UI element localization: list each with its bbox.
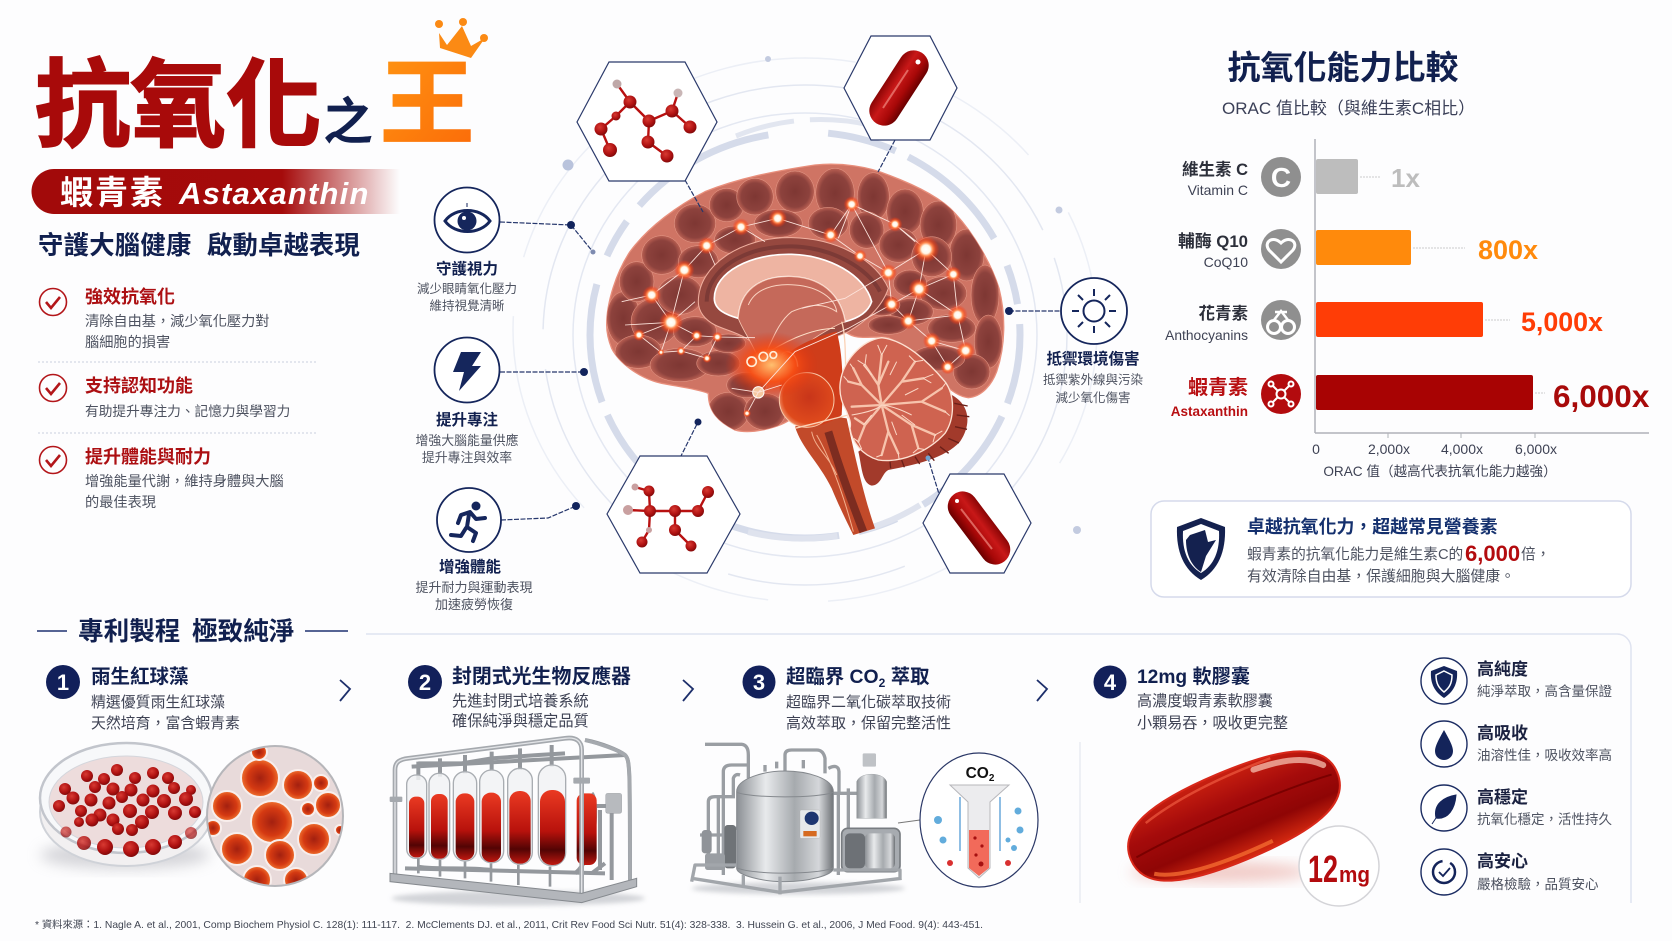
central glow xyxy=(725,332,818,398)
step 4: softgel: 12mg 軟膠囊 xyxy=(1137,666,1250,688)
step 1: haematococcus: 雨生紅球藻 xyxy=(91,666,189,688)
base frame xyxy=(692,865,902,892)
arrow xyxy=(340,680,350,701)
feature: safety: 高安心 xyxy=(1477,851,1528,871)
feature: absorption xyxy=(1421,721,1612,767)
benefit icon: focus xyxy=(415,338,519,465)
feature: absorption: 油溶性佳，吸收效率高 xyxy=(1477,747,1612,763)
row: vitamin C: C xyxy=(1271,162,1291,193)
benefit: stamina xyxy=(40,446,284,511)
axis labels: 2,000x xyxy=(1368,441,1410,457)
panel: quality features xyxy=(1421,658,1612,895)
step 3: supercritical CO2: 3 xyxy=(753,670,765,695)
row: astaxanthin: 蝦青素 xyxy=(1188,376,1248,399)
row: anthocyanins: Anthocyanins xyxy=(1165,328,1248,343)
hexagon: capsule top xyxy=(844,36,957,140)
panel: benefits checklist xyxy=(38,286,318,511)
step 2: photobioreactor: 先進封閉式培養系統 xyxy=(452,692,589,710)
benefit: strong antioxidant: 強效抗氧化 xyxy=(85,286,175,307)
step 3: supercritical CO2 xyxy=(692,666,1038,894)
heading: patented process xyxy=(37,617,348,646)
illustration: CO2 circle: 2 xyxy=(989,773,995,784)
limbic band xyxy=(698,238,888,352)
benefit icon: vision: 減少眼睛氧化壓力 xyxy=(417,281,517,296)
thalamus beads xyxy=(747,352,777,366)
row: vitamin C: Vitamin C xyxy=(1188,182,1248,198)
row: CoQ10: 輔酶 Q10 xyxy=(1178,232,1248,251)
subtitle banner: Astaxanthin: Astaxanthin xyxy=(178,176,370,211)
reactor tubes xyxy=(407,765,566,866)
feature: purity: 高純度 xyxy=(1477,659,1528,679)
step 2: photobioreactor: 確保純淨與穩定品質 xyxy=(452,712,589,730)
illustration: glowing brain xyxy=(607,164,1004,535)
heading: patented process: 極致純淨 xyxy=(192,617,294,646)
callout: superior antioxidant: 6,000 xyxy=(1465,541,1520,566)
illustration: softgel capsule xyxy=(1113,731,1355,901)
row: vitamin C xyxy=(1182,157,1420,198)
step 4: softgel: 高濃度蝦青素軟膠囊 xyxy=(1137,693,1273,710)
title xyxy=(35,18,488,160)
benefit: cognitive support: 有助提升專注力、記憶力與學習力 xyxy=(85,403,290,419)
benefit icon: stamina xyxy=(415,488,533,612)
icon: shield xyxy=(1177,518,1225,580)
back frame and pipes xyxy=(405,740,630,880)
heading: ORAC comparison xyxy=(1222,49,1475,118)
callout: superior antioxidant: 有效清除自由基，保護細胞與大腦健康。 xyxy=(1247,568,1515,585)
cerebrum base xyxy=(607,164,1004,432)
benefit: strong antioxidant: 清除自由基，減少氧化壓力對 xyxy=(85,313,269,330)
benefit icon: focus: 提升專注與效率 xyxy=(422,450,512,465)
axis labels: 6,000x xyxy=(1515,441,1557,457)
cerebellum xyxy=(840,338,952,461)
step 1: haematococcus: 精選優質雨生紅球藻 xyxy=(91,693,225,711)
benefit: stamina: 提升體能與耐力 xyxy=(85,446,211,467)
row: anthocyanins: 花青素 xyxy=(1198,304,1248,323)
row: CoQ10: 800x xyxy=(1478,235,1538,265)
callout: superior antioxidant: 蝦青素的抗氧化能力是維生素C的 xyxy=(1247,546,1463,563)
feature: safety xyxy=(1421,849,1599,895)
badge: 12mg: mg xyxy=(1339,862,1370,887)
step 2: photobioreactor: 封閉式光生物反應器 xyxy=(452,664,631,688)
benefit icon: environment protection: 抵禦環境傷害 xyxy=(1046,349,1140,368)
benefit: strong antioxidant xyxy=(40,286,269,351)
heading: ORAC comparison: 抗氧化能力比較 xyxy=(1228,49,1458,86)
badge: 12mg xyxy=(1299,826,1379,906)
callout: superior antioxidant: 卓越抗氧化力，超越常見營養素 xyxy=(1247,516,1498,537)
illustration: CO2 circle: CO xyxy=(966,765,989,782)
row: astaxanthin xyxy=(1171,374,1650,419)
connector end dots xyxy=(567,221,1013,510)
benefit icon: environment protection: 減少氧化傷害 xyxy=(1055,390,1131,405)
row: astaxanthin: 6,000x xyxy=(1553,378,1650,414)
illustration: CO2 circle xyxy=(898,753,1038,887)
row: CoQ10: CoQ10 xyxy=(1204,254,1248,270)
hexagon: molecule top xyxy=(577,62,717,181)
benefit icon: focus: 提升專注 xyxy=(436,410,498,429)
axis labels: ORAC 值（越高代表抗氧化能力越強） xyxy=(1323,463,1557,479)
feature: purity xyxy=(1421,658,1612,704)
row: vitamin C: 維生素 C xyxy=(1182,160,1248,179)
feature: purity: 純淨萃取，高含量保證 xyxy=(1477,683,1612,699)
benefit: stamina: 的最佳表現 xyxy=(85,495,156,511)
benefit icon: vision: 守護視力 xyxy=(436,259,498,278)
benefit: cognitive support: 支持認知功能 xyxy=(85,376,193,396)
step 2: photobioreactor: 2 xyxy=(419,670,431,695)
right vessel xyxy=(863,753,876,767)
step 2: photobioreactor xyxy=(390,664,645,906)
footnote: sources: * 資料來源：1. Nagle A. et al., 2001, Comp Biochem Physiol C. 128(1): 111-117. 2. McClements DJ. et al., 2011, Crit Rev Food Sci Nutr. 51(4): 328-338. 3. Hussein G. et al., 2006, J Med Food. 9(4): 443-451. xyxy=(35,918,983,931)
step 1: haematococcus: 1 xyxy=(57,670,69,695)
subtitle banner: Astaxanthin xyxy=(32,169,400,214)
background tech rings xyxy=(513,56,1097,602)
bar chart: ORAC values xyxy=(1165,139,1650,479)
gyri xyxy=(607,168,1002,431)
axis labels xyxy=(1312,441,1557,479)
callout: superior antioxidant xyxy=(1151,501,1631,597)
step 4: softgel xyxy=(1080,666,1379,906)
row: astaxanthin: Astaxanthin xyxy=(1171,404,1248,419)
feature: stability xyxy=(1421,785,1612,831)
glowing neural nodes xyxy=(633,196,975,417)
row: anthocyanins xyxy=(1165,300,1603,343)
feature: safety: 嚴格檢驗，品質安心 xyxy=(1477,876,1599,892)
benefit icon: environment protection: 抵禦紫外線與污染 xyxy=(1043,372,1143,387)
panel outline: process xyxy=(366,634,1631,903)
feature: absorption: 高吸收 xyxy=(1477,723,1528,743)
row: anthocyanins: 5,000x xyxy=(1521,307,1603,337)
step 4: softgel: 小顆易吞，吸收更完整 xyxy=(1137,715,1288,732)
cerebellum back lamellae xyxy=(858,393,969,486)
benefit icon: stamina: 增強體能 xyxy=(439,557,501,576)
benefit: strong antioxidant: 腦細胞的損害 xyxy=(85,335,170,351)
arrow xyxy=(1037,680,1047,701)
title: 之 xyxy=(323,94,373,150)
step 4: softgel: 4 xyxy=(1104,670,1117,695)
step 3: supercritical CO2: 超臨界 CO xyxy=(786,666,879,688)
benefit icon: vision xyxy=(417,188,517,313)
step 1: haematococcus: 天然培育，富含蝦青素 xyxy=(91,714,240,732)
feature: stability: 抗氧化穩定，活性持久 xyxy=(1477,812,1612,827)
badge: 12mg: 12 xyxy=(1308,849,1338,891)
step 1: haematococcus xyxy=(40,665,345,894)
title: 王 xyxy=(380,52,474,157)
step 3: supercritical CO2: 萃取 xyxy=(885,666,930,688)
axis labels: 0 xyxy=(1312,441,1320,457)
arrow xyxy=(683,680,693,701)
step 3: supercritical CO2: 超臨界二氧化碳萃取技術 xyxy=(786,694,951,711)
illustration: petri dish xyxy=(40,743,212,869)
pipework xyxy=(700,744,858,875)
benefit icon: stamina: 加速疲勞恢復 xyxy=(435,597,513,612)
callout: superior antioxidant: 倍， xyxy=(1521,546,1550,563)
step 3: supercritical CO2: 2 xyxy=(879,676,886,690)
hexagon: capsule bottom xyxy=(923,474,1031,573)
benefit icon: environment protection xyxy=(1043,278,1143,405)
tagline: 守護大腦健康 xyxy=(38,232,192,260)
step 3: supercritical CO2: 高效萃取，保留完整活性 xyxy=(786,715,951,732)
feature: stability: 高穩定 xyxy=(1477,787,1528,807)
row: CoQ10 xyxy=(1178,229,1538,270)
illustration: algae cell magnified xyxy=(205,744,345,894)
benefit icon: focus: 增強大腦能量供應 xyxy=(415,433,519,448)
hexagon: molecule bottom xyxy=(607,456,740,573)
inner dome xyxy=(738,277,845,358)
icon: crown xyxy=(435,18,488,58)
heading: ORAC comparison: ORAC 值比較（與維生素C相比） xyxy=(1222,99,1475,118)
subtitle banner: Astaxanthin: 蝦青素 xyxy=(60,174,165,211)
neural network lines xyxy=(622,204,966,413)
brain stem xyxy=(795,415,875,535)
crescent: corpus callosum xyxy=(714,254,872,322)
illustration: extraction tank xyxy=(692,744,905,894)
benefit icon: vision: 維持視覺清晰 xyxy=(429,298,505,313)
midbrain and pons xyxy=(755,322,848,428)
connector lines xyxy=(500,140,1061,530)
front frame xyxy=(395,738,630,898)
benefit: stamina: 增強能量代謝，維持身體與大腦 xyxy=(85,474,284,490)
axis labels: 4,000x xyxy=(1441,441,1483,457)
main vessel xyxy=(737,771,833,882)
title: 抗氧化 xyxy=(35,54,322,160)
illustration: reactor xyxy=(390,738,645,906)
benefit icon: stamina: 提升耐力與運動表現 xyxy=(415,580,533,595)
tagline second part: 啟動卓越表現 xyxy=(207,232,360,260)
benefit: cognitive support xyxy=(40,374,290,419)
row: vitamin C: 1x xyxy=(1391,163,1420,193)
heading: patented process: 專利製程 xyxy=(78,617,180,646)
